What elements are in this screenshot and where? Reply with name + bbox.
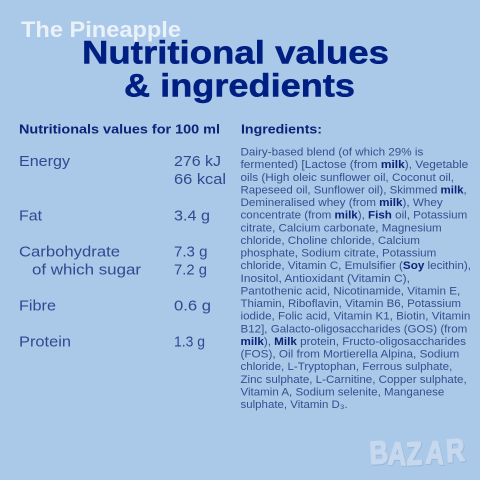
row: fat	[19, 207, 210, 224]
title: Nutritional values	[82, 34, 389, 70]
ingredients text block: (FOS), Oil from Mortierella Alpina, Sodium	[240, 349, 459, 361]
ingredients text block: milk), Milk protein, Fructo-oligosaccharides	[240, 336, 467, 348]
ingredients text block: oils (High oleic sunflower oil, Coconut oil,	[240, 172, 454, 184]
ingredients text block: Thiamin, Riboflavin, Vitamin B6, Potassium	[240, 298, 461, 310]
row: energy: 66 kcal	[174, 171, 226, 188]
ingredients text block: Zinc sulphate, L-Carnitine, Copper sulphate,	[240, 374, 467, 386]
ingredients text block: fermented) [Lactose (from milk), Vegetable	[240, 159, 468, 171]
ingredients text block: chloride, Choline chloride, Calcium	[240, 235, 420, 247]
ingredients text block: citrate, Calcium carbonate, Magnesium	[240, 222, 442, 234]
row: fibre: 0.6 g	[174, 297, 211, 314]
row: fibre	[19, 297, 211, 314]
row: energy: Energy	[19, 153, 71, 170]
row: fat: Fat	[19, 207, 43, 224]
watermark: Bazar logo: BAZAR	[370, 434, 467, 474]
ingredients text block: Dairy-based blend (of which 29% is	[240, 146, 424, 158]
ingredients text block: iodide, Folic acid, Vitamin K1, Biotin, Vitamin	[240, 311, 470, 323]
row: energy: 276 kJ	[174, 153, 221, 170]
ingredients text block: concentrate (from milk), Fish oil, Potassium	[240, 210, 467, 222]
title: & ingredients	[124, 68, 355, 104]
row: protein: Protein	[19, 334, 71, 351]
row: protein	[19, 334, 205, 351]
ingredients text block: Demineralised whey (from milk), Whey	[240, 197, 443, 209]
row: carbohydrate: Carbohydrate	[19, 243, 120, 260]
ingredients text block: B12], Galacto-oligosaccharides (GOS) (from	[240, 323, 467, 335]
row: fibre: Fibre	[19, 297, 56, 314]
ingredients text block: Rapeseed oil, Sunflower oil), Skimmed milk,	[240, 184, 467, 196]
row: energy	[19, 153, 226, 188]
panel: nutrition values	[19, 122, 226, 351]
panel: ingredients	[240, 122, 471, 411]
heading: ingredients: Ingredients:	[241, 122, 322, 137]
watermark: Bazar logo: BAZAR	[369, 433, 466, 473]
row: carbohydrate: of which sugar	[32, 261, 141, 278]
row: protein: 1.3 g	[174, 334, 205, 351]
watermark: The Pineapple: The Pineapple	[21, 17, 181, 42]
ingredients text block: Pantothenic acid, Nicotinamide, Vitamin E,	[240, 285, 460, 297]
heading: nutrition values: Nutritionals values for 100 ml	[19, 122, 220, 137]
ingredients text block: Inositol, Antioxidant (Vitamin C),	[240, 273, 410, 285]
ingredients text block: chloride, Vitamin C, Emulsifier ( Soy lecithin),	[240, 260, 471, 272]
ingredients text block	[240, 146, 471, 411]
ingredients text block: phosphate, Sodium citrate, Potassium	[240, 248, 436, 260]
row: fat: 3.4 g	[174, 207, 210, 224]
row: carbohydrate: 7.2 g	[174, 261, 207, 278]
ingredients text block: Vitamin A, Sodium selenite, Manganese	[240, 386, 444, 398]
ingredients text block: sulphate, Vitamin D₃.	[240, 399, 348, 411]
row: carbohydrate: 7.3 g	[174, 243, 208, 260]
title	[82, 34, 389, 104]
row: carbohydrate	[19, 243, 208, 278]
ingredients text block: chloride, L-Tryptophan, Ferrous sulphate,	[240, 361, 452, 373]
